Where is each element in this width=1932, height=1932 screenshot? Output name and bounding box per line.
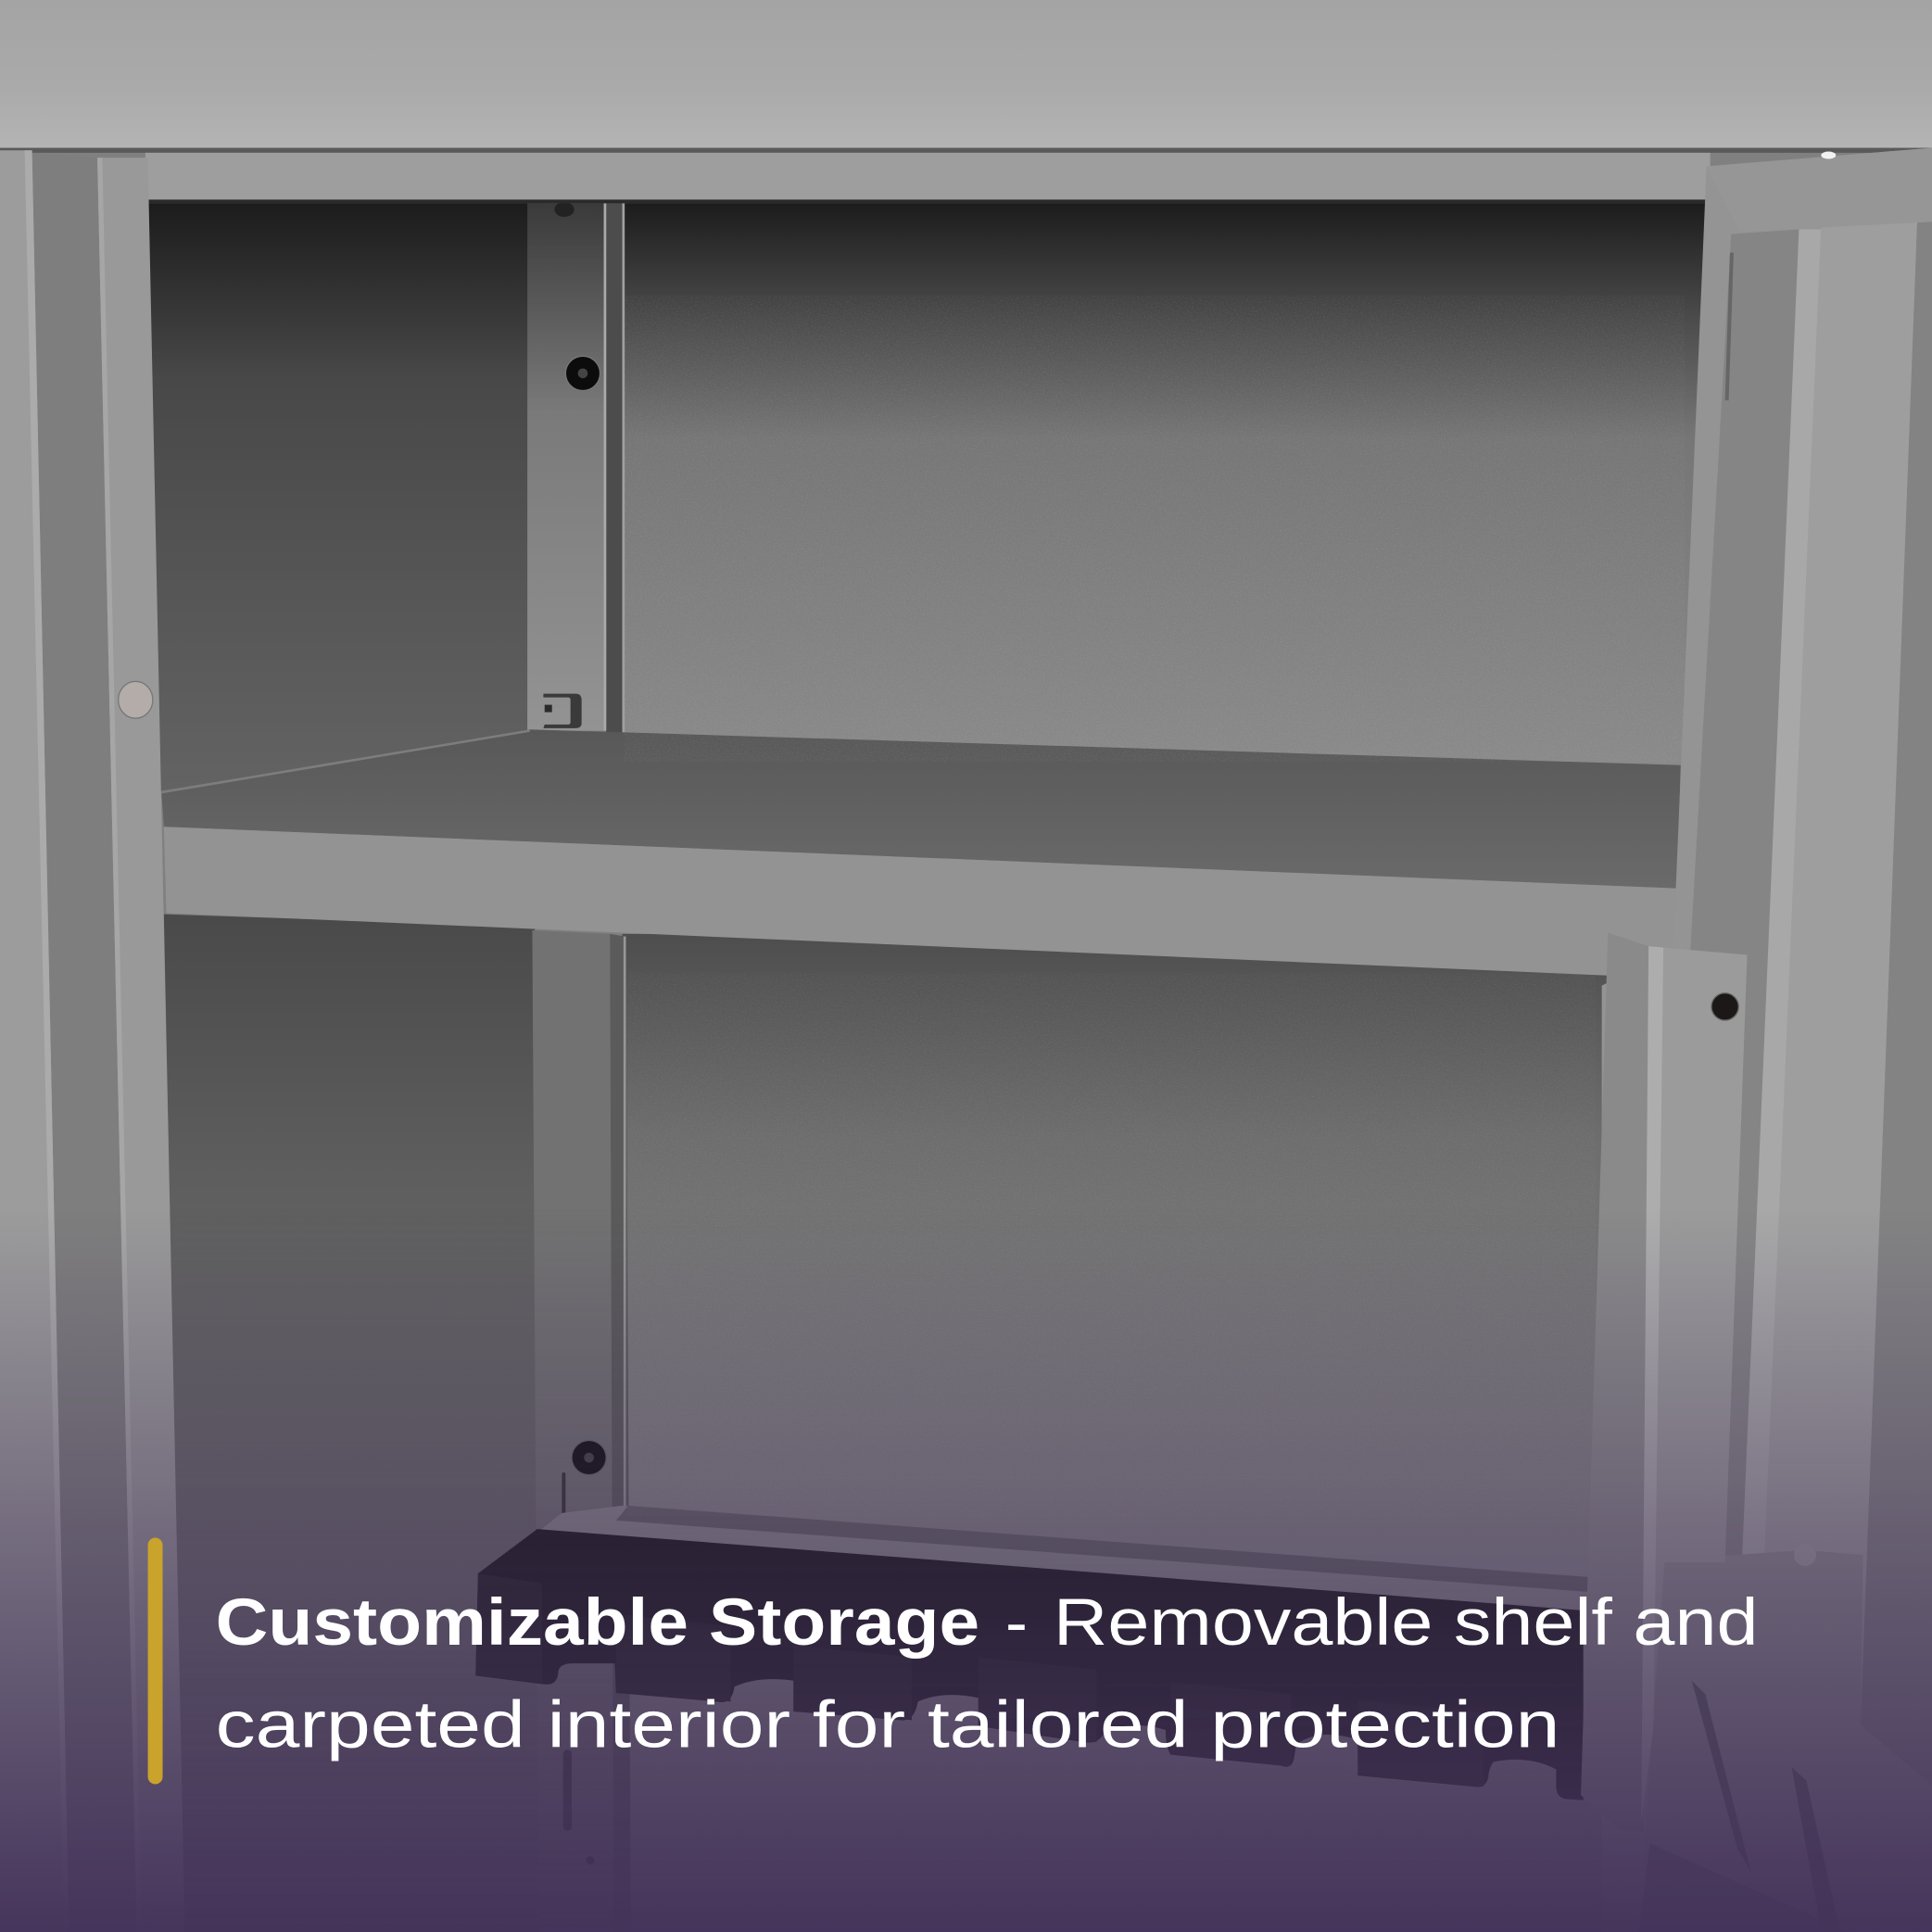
cabinet interior lower: mounting post xyxy=(532,930,631,1932)
lower floor rail xyxy=(538,1506,1589,1624)
caption bold lead: Customizable Storage xyxy=(216,1585,979,1660)
cabinet interior upper: back wall xyxy=(616,203,1712,782)
icon: lower screw xyxy=(572,1440,606,1475)
cabinet interior upper: mounting post xyxy=(527,202,625,733)
icon: hinge screw xyxy=(1711,993,1738,1020)
adjustable shelf top xyxy=(161,729,1681,889)
purple gradient overlay xyxy=(0,1207,1932,1932)
left door jamb xyxy=(0,150,184,1932)
accent bar xyxy=(148,1537,163,1784)
icon: shelf clip xyxy=(543,694,582,728)
caption line two: carpeted interior for tailored protection xyxy=(216,1688,1559,1762)
header strip xyxy=(145,153,1711,202)
noise texture on walls xyxy=(625,296,1685,1516)
adjustable shelf front xyxy=(164,827,1677,979)
cabinet interior lower: back wall xyxy=(623,934,1645,1932)
caption line one: Removable shelf and xyxy=(1054,1585,1759,1660)
caption dash: - xyxy=(1005,1585,1028,1660)
top cabinet panel xyxy=(0,0,1932,148)
cabinet interior lower: side wall xyxy=(164,915,542,1932)
right door xyxy=(1581,148,1932,1932)
caption xyxy=(216,1585,1759,1762)
door hinge plate xyxy=(1581,933,1648,1832)
foam gun rack xyxy=(475,1529,1584,1800)
cabinet interior upper: side wall xyxy=(148,203,532,791)
icon: rivet xyxy=(119,681,153,718)
icon: screw xyxy=(565,356,600,391)
lower door bracket xyxy=(1639,1550,1932,1932)
